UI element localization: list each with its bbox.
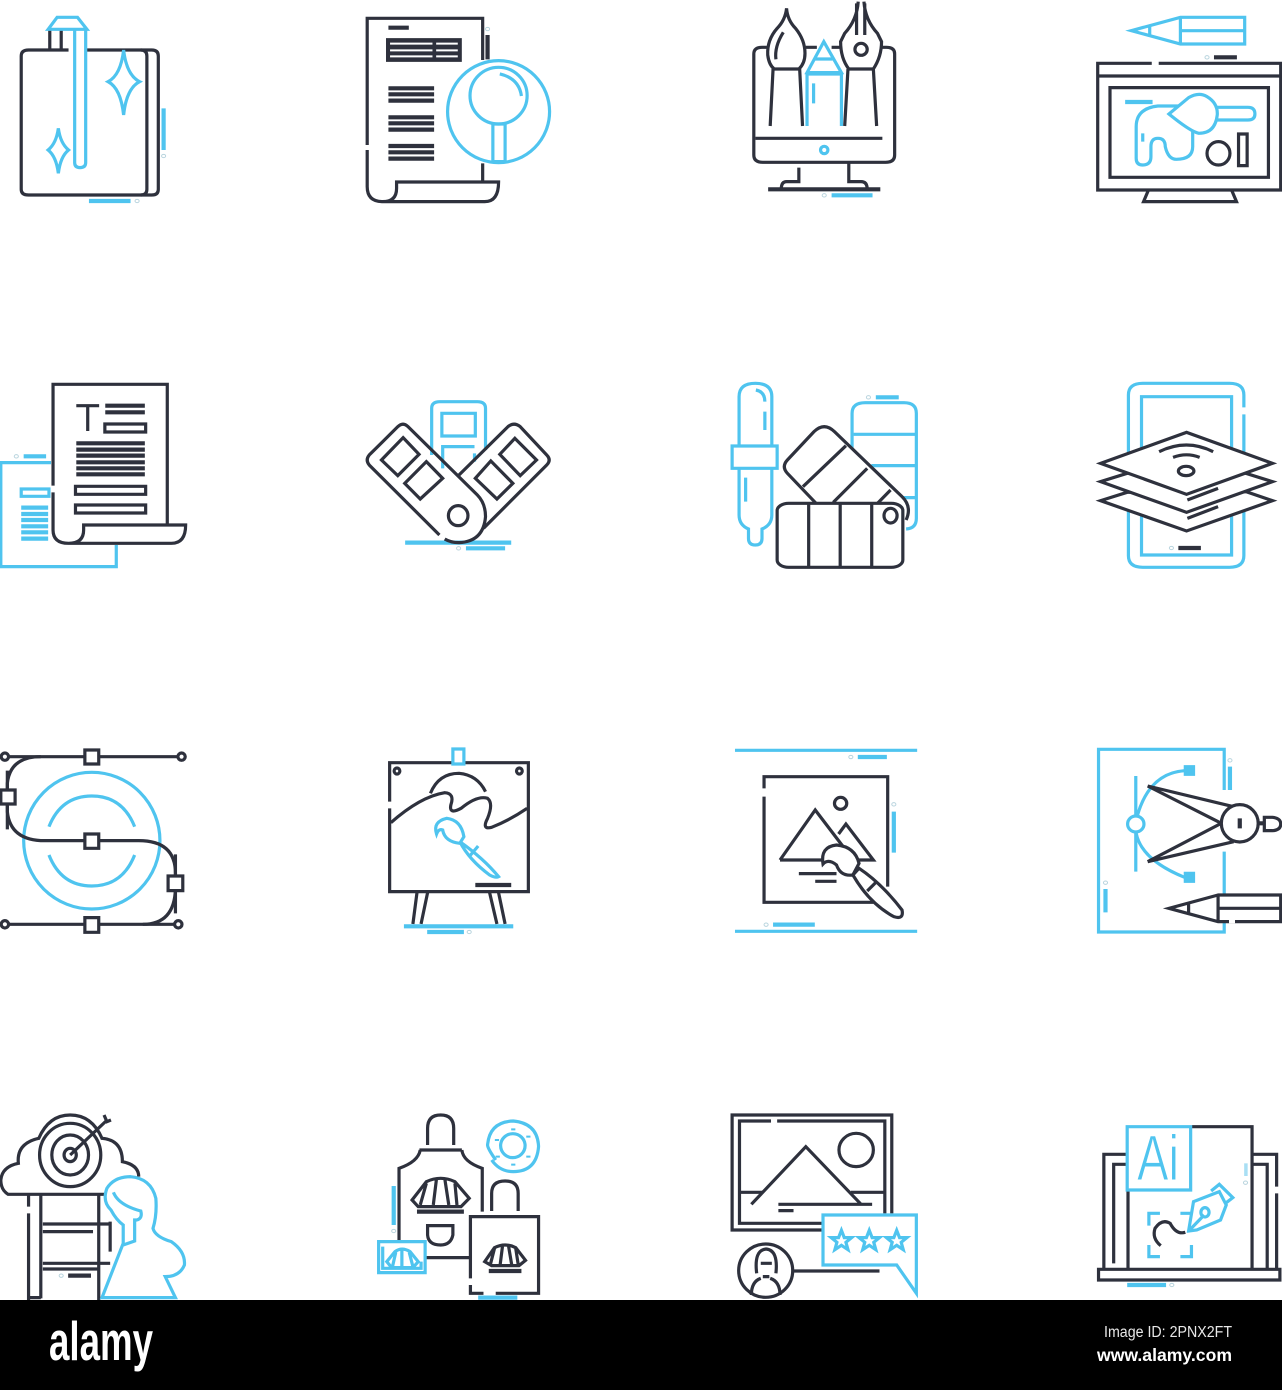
icon: colour swatch fan (367, 402, 549, 550)
icon: notebook with ribbon and sparkles (21, 17, 166, 203)
icon: cloud target, ladder and woman (1, 1115, 185, 1300)
icon: text document over blue sheet (1, 384, 186, 567)
icon: document with magnifier (367, 18, 550, 202)
icon: compass drawing curve with pencil (1099, 749, 1281, 932)
icon: picture frame with paintbrush (735, 750, 917, 931)
icon: dropper with colour swatches (732, 383, 916, 567)
Ai label: Ai (1137, 1122, 1179, 1194)
icon: monitor with brush, pencil and pen nib (754, 2, 895, 197)
icon: laptop with Ai document and pen tool (1099, 1122, 1280, 1287)
icon: phone with stacked layers (1101, 383, 1273, 567)
footer bar with logo and image id (0, 1300, 1282, 1390)
image id: Image ID: 2PNX2FT (1104, 1324, 1232, 1341)
website: www.alamy.com (1096, 1345, 1232, 1365)
icon: drawing tablet with pencil (1098, 17, 1281, 202)
icon: picture with star rating and avatar (732, 1115, 916, 1297)
logo: alamy: alamy (49, 1310, 153, 1372)
icon: bezier curve with anchor points (1, 750, 185, 932)
icon: easel with painting (390, 749, 528, 934)
icon: apron, tote bag and bakery label (379, 1115, 539, 1298)
